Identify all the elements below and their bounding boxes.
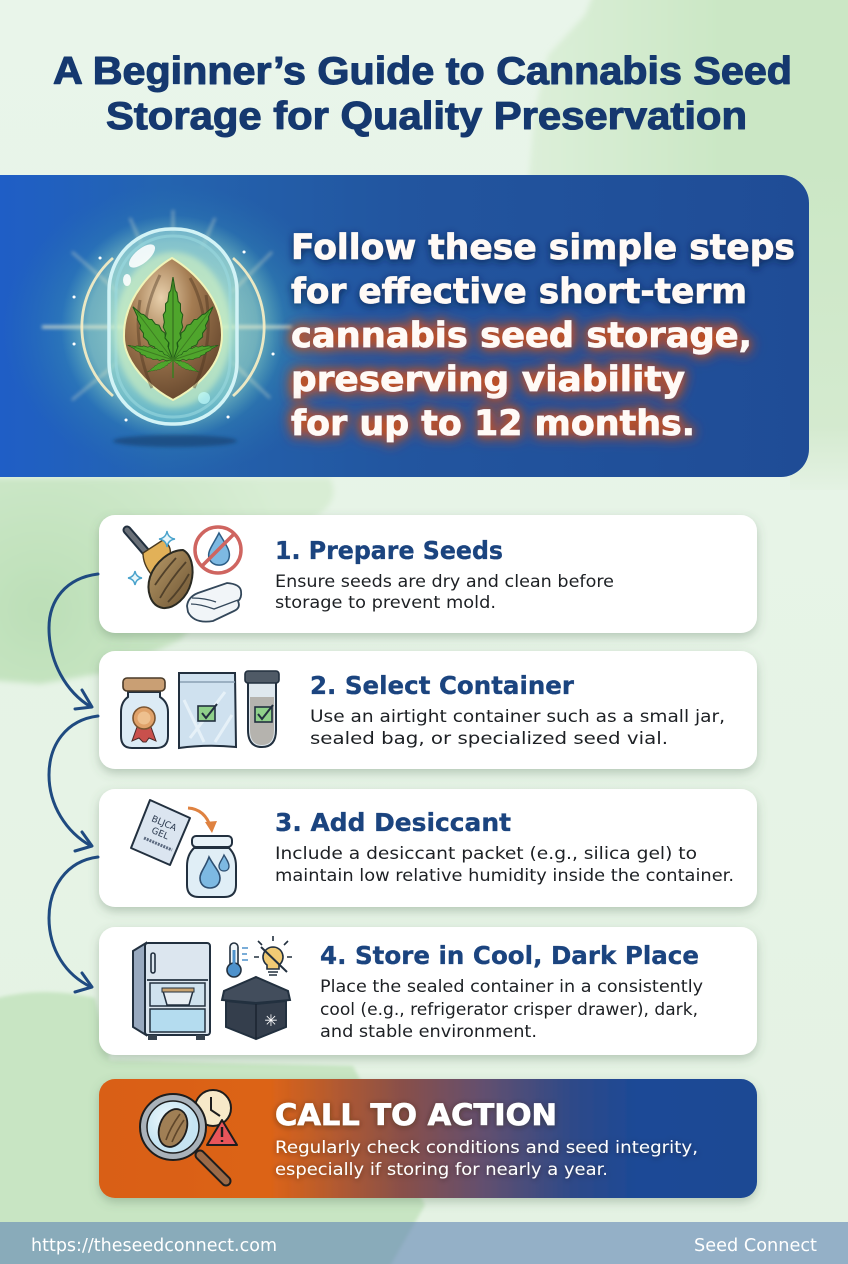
title — [53, 50, 792, 138]
panel: hero banner — [0, 175, 809, 477]
step 4 text: Place the sealed container in a consistently — [320, 977, 703, 997]
step 3 text — [275, 808, 734, 886]
call to action text: CALL TO ACTION — [275, 1098, 557, 1132]
hero text: preserving viability — [291, 360, 685, 400]
step 4 text: cool (e.g., refrigerator crisper drawer), dark, — [320, 1000, 698, 1020]
icon: seed in glowing capsule — [3, 184, 347, 476]
step 1 text: storage to prevent mold. — [275, 593, 496, 613]
step 1 text: 1. Prepare Seeds — [275, 536, 503, 565]
step 3 text: 3. Add Desiccant — [275, 808, 511, 837]
call to action text — [275, 1098, 698, 1180]
arrow: step 2 to step 3 — [49, 716, 98, 851]
call to action text: especially if storing for nearly a year. — [275, 1160, 608, 1180]
step 4 text: 4. Store in Cool, Dark Place — [320, 941, 699, 970]
icon: silica packet and jar: BLJCA — [150, 814, 179, 834]
title: Storage for Quality Preservation — [106, 95, 747, 138]
icon: fridge, thermometer, bulb, box — [133, 936, 292, 1040]
step 2 text: Use an airtight container such as a small jar, — [310, 707, 725, 727]
footer brand: Seed Connect — [694, 1235, 817, 1256]
icon: brush, seed, no water, towel — [127, 527, 241, 622]
panel: call to action — [99, 1079, 757, 1198]
hero text: for up to 12 months. — [291, 404, 695, 444]
step 3 text: Include a desiccant packet (e.g., silica gel) to — [275, 844, 697, 864]
arrow: step 3 to step 4 — [49, 857, 98, 992]
step 1 text: Ensure seeds are dry and clean before — [275, 572, 614, 592]
step 3 text: maintain low relative humidity inside the container. — [275, 866, 734, 886]
title: A Beginner’s Guide to Cannabis Seed — [53, 50, 792, 93]
icon: silica packet and jar: GEL — [150, 826, 170, 842]
icon: fridge, thermometer, bulb, box: ✳ — [264, 1011, 278, 1030]
footer bar — [0, 1222, 848, 1264]
step 4 text: and stable environment. — [320, 1022, 537, 1042]
panel: step 3 add desiccant — [99, 789, 757, 907]
panel: step 4 store in cool dark place — [99, 927, 757, 1055]
icon: magnifier, seed, clock, warning — [140, 1090, 237, 1181]
panel: step 2 select container — [99, 651, 757, 769]
icon: cannabis leaf — [125, 277, 221, 378]
call to action text: Regularly check conditions and seed integrity, — [275, 1138, 698, 1158]
step 2 text: 2. Select Container — [310, 671, 575, 700]
step 1 text — [275, 536, 614, 613]
step 4 text — [320, 941, 703, 1042]
hero text: for effective short-term — [291, 272, 747, 312]
step 2 text — [310, 671, 725, 749]
arrow: step 1 to step 2 — [49, 574, 98, 709]
hero text: Follow these simple steps — [291, 228, 795, 268]
step 2 text: sealed bag, or specialized seed vial. — [310, 729, 668, 749]
icon: jar, bag, vial — [121, 671, 279, 748]
icon: silica packet and jar — [131, 800, 236, 897]
footer url: https://theseedconnect.com — [31, 1235, 277, 1256]
panel: step 1 prepare seeds — [99, 515, 757, 633]
hero text: cannabis seed storage, — [291, 316, 752, 356]
hero text — [291, 228, 795, 444]
